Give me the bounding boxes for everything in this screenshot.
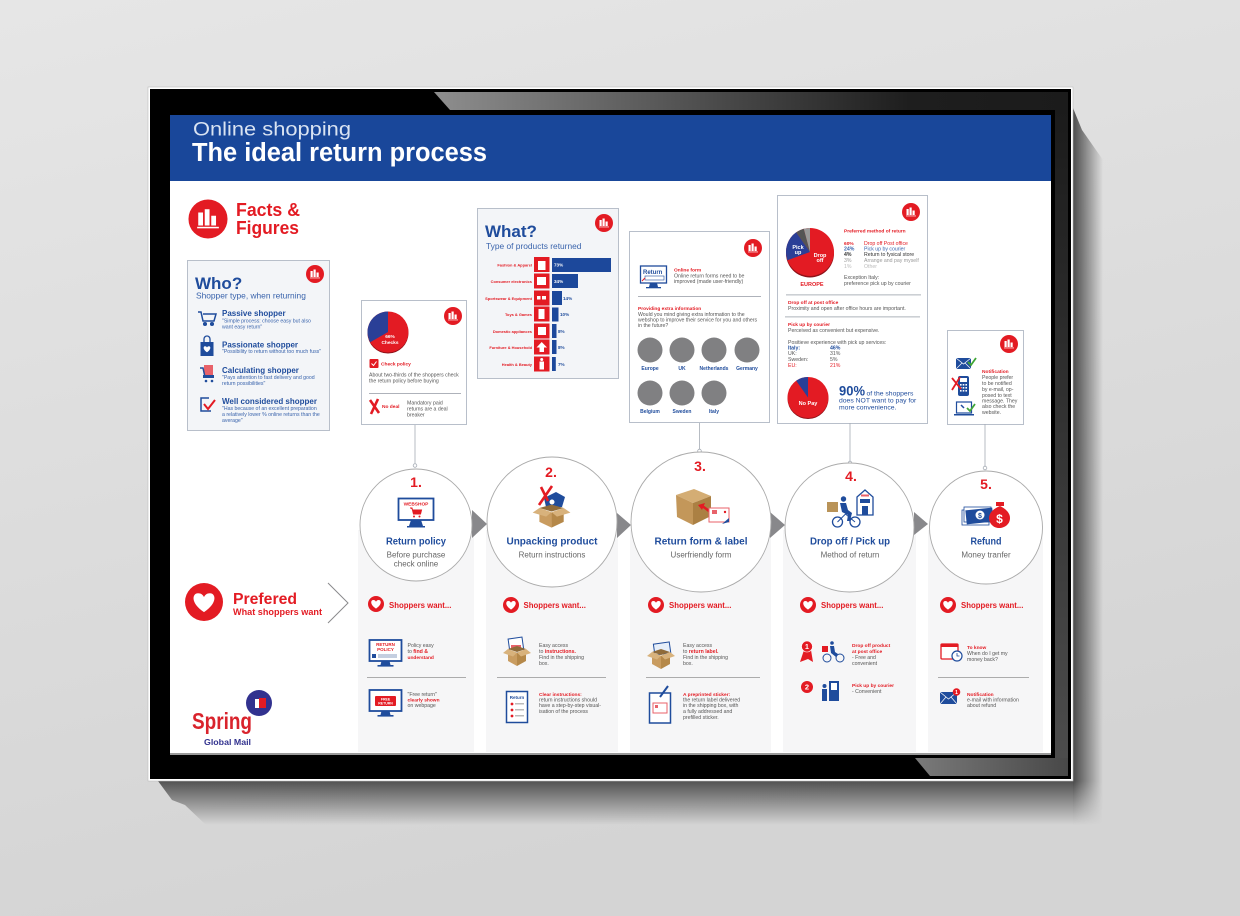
step 4 wants [800, 597, 894, 701]
step 3 wants: Easy access [683, 643, 713, 649]
icon: number two: 2 [805, 683, 809, 692]
panel: drop off facts: EU: [788, 363, 797, 369]
panel: drop off facts: Preferred method of return [844, 228, 906, 234]
bar chart: products returned: 7% [558, 362, 565, 367]
step 4 wants: Drop off product [852, 643, 891, 649]
panel: return form facts: in the future? [638, 323, 668, 329]
bar chart: products returned [485, 257, 611, 372]
step 3 circle: 3. [694, 458, 706, 474]
step 4 circle [785, 463, 914, 592]
step 2 wants: Shoppers want... [524, 601, 586, 610]
panel: drop off facts: Drop off at post office [788, 300, 839, 306]
step 1 circle: check online [394, 560, 439, 568]
icon: bicycle courier and post office [827, 490, 873, 527]
bar chart: products returned: 8% [558, 329, 565, 334]
panel: return form facts: webshop to improve their service for you and others [638, 318, 757, 324]
step 2 circle: Unpacking product [506, 536, 598, 548]
frame shadow: bottom [158, 781, 1073, 825]
panel: return form facts: Providing extra information [638, 306, 701, 312]
step 2 wants: Easy access [539, 643, 569, 649]
step 3 wants: to return label. [683, 649, 719, 655]
panel: who: want easy return" [222, 324, 262, 330]
bar chart: products returned: Fashion & Apparel [497, 262, 532, 267]
panel: drop off facts: Drop off Post office [864, 241, 908, 247]
picture frame [148, 87, 1073, 781]
bar chart: products returned: 14% [563, 296, 572, 301]
panel: return form facts: improved (made user-friendly) [674, 279, 743, 285]
panel: return form facts: Belgium [640, 409, 660, 415]
panel: drop off facts: Italy: [788, 346, 800, 352]
panel: return policy facts: No deal [382, 404, 400, 410]
step 4 wants: - Convenient [852, 689, 882, 695]
icon: courier at door [822, 681, 839, 701]
icon: check document [201, 398, 215, 411]
step 4 circle: 4. [845, 468, 857, 484]
panel: who: "Simple process: choose easy but also [222, 318, 311, 324]
panel: drop off facts: 21% [830, 363, 841, 369]
step 1 circle: Before purchase [387, 550, 446, 560]
prefered heading: What shoppers want [233, 607, 322, 617]
panel: who: Passionate shopper [222, 340, 298, 350]
panel: drop off facts [778, 196, 928, 424]
step 3 wants [646, 597, 760, 723]
panel: who: Shopper type, when returning [196, 290, 306, 300]
pie chart: preferred method: up [795, 250, 802, 256]
panel: return form facts: UK [678, 366, 686, 372]
step 1 circle: 1. [410, 474, 422, 490]
facts and figures heading: Figures [236, 218, 299, 238]
bar chart: products returned: Toys & Games [505, 312, 533, 317]
step 5 wants: about refund [967, 703, 996, 709]
step 1 wants: on webpage [408, 703, 436, 709]
chevron arrow [328, 583, 348, 623]
pie chart: checks: Checks [381, 340, 399, 346]
panel: who: Who? [195, 274, 242, 293]
icon: crossed out phone [952, 376, 969, 396]
step 5 circle [930, 471, 1042, 584]
bar chart: products returned: 10% [560, 312, 569, 317]
panel: what [478, 208, 618, 378]
panel: drop off facts: 3% [844, 258, 852, 264]
panel: who: Well considered shopper [222, 397, 317, 406]
panel: return policy facts: the return policy before buying [369, 378, 439, 384]
pie chart: preferred method: Pick [792, 245, 805, 251]
pie chart: checks [368, 312, 408, 354]
step 1 circle: Return policy [386, 536, 446, 548]
step 2 wants: box. [539, 661, 549, 667]
panel: notification facts: Notification [982, 369, 1009, 375]
panel: who: "Has because of an excellent preparation [222, 406, 317, 412]
icon: red cross [370, 399, 379, 414]
step 4 wants: at post office [852, 649, 882, 655]
panel: drop off facts: 60% [844, 241, 854, 247]
panel: notification facts [948, 330, 1024, 424]
step 4 wants: - Free and [852, 655, 876, 661]
step 3 circle [631, 452, 771, 592]
step 5 wants: e-mail with information [967, 698, 1019, 704]
panel: drop off facts: Positieve experience with pick up services: [788, 340, 886, 346]
step 2 circle: 2. [545, 464, 557, 480]
icon: calendar and clock [941, 644, 962, 661]
connector lines [413, 423, 987, 470]
step 2 wants: to instructions. [539, 649, 576, 655]
step 5 circle: Money tranfer [961, 550, 1011, 560]
callout: 90 percent: of the shoppers [866, 390, 914, 398]
icon: calculator cart [200, 365, 214, 382]
panel: return policy facts: breaker [407, 412, 425, 418]
step 5 wants: Notification [967, 692, 994, 698]
panel: return form facts: Netherlands [700, 366, 729, 372]
pie chart: preferred method [786, 228, 834, 278]
facts and figures heading: Facts & [236, 200, 300, 220]
step 5 wants [938, 597, 1029, 709]
panel: return policy facts: returns are a deal [407, 406, 448, 412]
frame shadow: right [1073, 108, 1103, 825]
icon: free return monitor [370, 690, 402, 717]
step 1 wants: to find & [408, 649, 428, 655]
panel: drop off facts: Perceived as convenient but expensive. [788, 328, 879, 334]
country circles [638, 338, 760, 406]
step 3 wants: prefilled sticker. [683, 715, 719, 721]
panel: drop off facts: preference pick up by courier [844, 281, 911, 287]
step 3 wants: Find in the shipping [683, 655, 728, 661]
panel: drop off facts: 24% [844, 246, 855, 252]
icon: laptop with check [954, 402, 975, 416]
panel: drop off facts: Proximity and open after office hours are important. [788, 306, 906, 312]
callout: 90 percent: does NOT want to pay for [839, 398, 917, 404]
panel: notification facts: People prefer [982, 375, 1013, 381]
panel: return policy facts: Mandatory paid [407, 400, 443, 406]
icon: return form monitor: Return [643, 270, 663, 276]
step 1 wants: clearly shown [408, 698, 440, 704]
bar chart: products returned: Furniture & Household [489, 345, 533, 350]
panel: drop off facts: 1% [844, 264, 852, 270]
logo: spring global mail: Global Mail [204, 738, 251, 747]
header title: The ideal return process [192, 139, 487, 167]
prefered heading [185, 583, 322, 621]
pie chart: preferred method: off [816, 258, 824, 264]
bar chart: products returned: 8% [558, 345, 565, 350]
icon: bag with heart [200, 336, 214, 356]
panel: return form facts: Italy [709, 409, 719, 415]
panel: drop off facts: Exception Italy: [844, 275, 879, 281]
step 2 wants [497, 597, 606, 722]
icon: cart [198, 312, 216, 325]
bar chart: products returned: Health & Beauty [502, 362, 533, 367]
step 3 wants: Shoppers want... [669, 601, 731, 610]
panel: who: Passive shopper [222, 309, 286, 318]
panel: return form facts: Europe [641, 366, 659, 372]
panel: return form facts: Germany [736, 366, 758, 372]
panel: drop off facts: EUROPE [800, 282, 824, 288]
icon: return form monitor [640, 266, 666, 288]
step 2 wants: Clear instructions: [539, 692, 582, 698]
icon: bicycle courier [822, 641, 844, 662]
panel: notification facts: website. [982, 410, 1001, 416]
step 4 circle: Drop off / Pick up [810, 536, 890, 548]
step 2 circle: Return instructions [519, 550, 585, 560]
panel: return form facts: Online return forms need to be [674, 274, 744, 280]
pie chart: checks: 66% [385, 334, 396, 340]
step 1 wants: Policy easy [408, 643, 434, 649]
callout: 90 percent: 90% [839, 382, 866, 398]
step 2 wants: Find in the shipping [539, 655, 584, 661]
icon: free return monitor: RETURN [378, 702, 393, 706]
icon: envelope notification: 1 [955, 690, 958, 696]
panel: return policy facts [362, 300, 466, 424]
step 4 wants: Shoppers want... [821, 601, 883, 610]
panel: drop off facts: Other [864, 264, 877, 270]
step 3 wants: box. [683, 661, 693, 667]
step 3 circle: Userfriendly form [671, 550, 732, 560]
step 3 wants: the return label delivered [683, 698, 740, 704]
panel: notification facts: posed to text [982, 393, 1012, 399]
icon: box with form [647, 642, 675, 669]
icon: return policy monitor [370, 640, 402, 667]
panel: notification facts: to be notified [982, 381, 1012, 387]
icon: free return monitor: FREE [381, 698, 391, 702]
step 5 wants: When do I get my [967, 651, 1008, 657]
pie chart: no pay [788, 377, 828, 419]
bar chart: products returned: Consumer electronics [491, 279, 533, 284]
panel: drop off facts: Pick up by courier [788, 322, 830, 328]
icon: prefilled label document [650, 686, 670, 723]
step 1 wants: understand [408, 655, 434, 661]
icon: money and bag [962, 502, 1010, 528]
step 3 circle: Return form & label [654, 536, 748, 548]
bar chart: products returned: 34% [554, 279, 563, 284]
icon: first place ribbon: 1 [805, 644, 809, 651]
panel: notification facts: message. They [982, 398, 1018, 404]
process arrows [472, 510, 928, 538]
callout: 90 percent [839, 382, 917, 412]
step 3 wants: a fully addressed and [683, 709, 732, 715]
step 5 circle: 5. [980, 476, 992, 492]
panel: return form facts [630, 232, 770, 422]
icon: box and label [676, 489, 729, 525]
panel: return policy facts: Check policy [381, 362, 411, 368]
panel: return form facts: Would you mind giving extra information to the [638, 312, 745, 318]
icon: return policy monitor: RETURN [376, 642, 395, 647]
panel: drop off facts: Pick up by courier [864, 246, 906, 252]
panel: drop off facts: 4% [844, 252, 852, 258]
icon: box with instructions [503, 637, 531, 666]
step 3 wants: in the shipping box, with [683, 703, 738, 709]
icon: check box [370, 359, 378, 368]
panel: drop off facts: Sweden: [788, 357, 808, 363]
panel: return policy facts: About two-thirds of the shoppers check [369, 372, 459, 378]
step 2 circle [487, 457, 617, 587]
panel: who: a relatively lower % online returns than the [222, 412, 320, 418]
icon: return policy monitor: POLICY [377, 647, 394, 652]
panel: drop off facts: 46% [830, 346, 841, 352]
step 4 wants: Pick up by courier [852, 683, 894, 689]
panel: what: What? [485, 222, 537, 241]
pie chart: preferred method: Drop [814, 253, 827, 259]
prefered heading: Prefered [233, 591, 297, 608]
step 2 wants: have a step-by-step visual- [539, 703, 601, 709]
panel: who [188, 260, 330, 430]
step 4 wants: convenient [852, 661, 878, 667]
pie chart: no pay: No Pay [799, 401, 818, 407]
callout: 90 percent: more convenience. [839, 404, 897, 412]
step 2 wants: isation of the process [539, 709, 588, 715]
step 2 wants: return instructions should [539, 698, 597, 704]
panel: who: return possibilities" [222, 381, 266, 387]
panel: return form facts: Sweden [673, 409, 691, 415]
panel: drop off facts: Return to fysical store [864, 252, 914, 258]
step 1 wants: Shoppers want... [389, 601, 451, 610]
logo: spring global mail [192, 690, 272, 747]
step 5 wants: Shoppers want... [961, 601, 1023, 610]
step 5 wants: To know [967, 645, 987, 651]
panel: who: average" [222, 418, 243, 424]
panel: who: "Pays attention to fast delivery and good [222, 375, 315, 381]
panel: drop off facts: 5% [830, 357, 838, 363]
icon: instructions document: Return [510, 695, 525, 700]
header subtitle: Online shopping [193, 118, 351, 140]
panel: what: Type of products returned [486, 241, 582, 251]
step 1 wants: "Free return" [408, 692, 437, 698]
step 5 circle: Refund [970, 536, 1002, 548]
icon: money and bag: $ [996, 512, 1003, 526]
panel: who: Calculating shopper [222, 366, 299, 375]
step 5 wants: money back? [967, 657, 998, 663]
panel: drop off facts: 31% [830, 351, 841, 357]
step 4 circle: Method of return [821, 550, 879, 560]
icon: envelope with check [956, 358, 976, 369]
panel: notification facts: by e-mail, op- [982, 387, 1014, 393]
panel: notification facts: also check the [982, 404, 1015, 410]
bar chart: products returned: 73% [554, 262, 563, 268]
icon: money and bag: $ [978, 513, 982, 520]
header banner [170, 115, 1051, 181]
icon: box with shirt and cross [533, 486, 570, 528]
icon: webshop monitor: WEBSHOP [404, 502, 429, 508]
facts and figures heading [188, 199, 300, 239]
step 3 wants: A preprinted sticker: [683, 692, 731, 698]
step 1 circle [360, 469, 472, 581]
panel: who: "Possibility to return without too much fuss" [222, 349, 321, 355]
logo: spring global mail: Spring [192, 708, 252, 734]
bar chart: products returned: Sportswear & Equipment [485, 296, 533, 301]
grey step columns [358, 530, 1043, 752]
step 1 wants [367, 596, 466, 717]
bar chart: products returned: Domestic appliances [493, 329, 533, 334]
panel: return form facts: Online form [674, 268, 701, 274]
panel: drop off facts: UK: [788, 351, 797, 357]
panel: drop off facts: Arrange and pay myself [864, 258, 919, 264]
